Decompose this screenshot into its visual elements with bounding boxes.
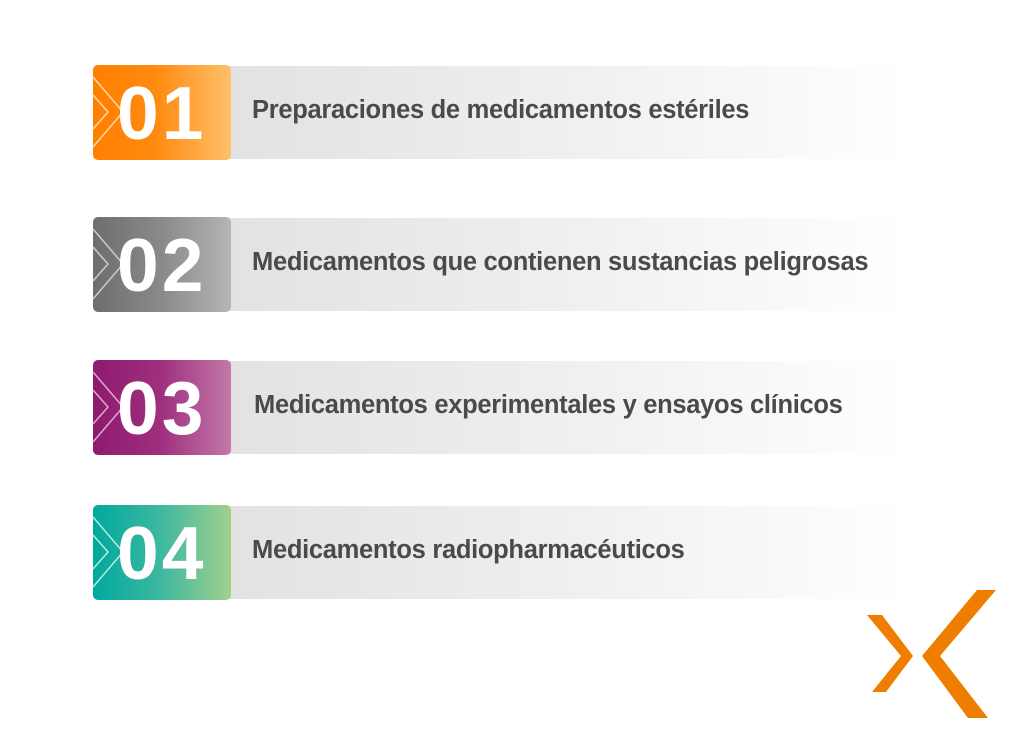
row 2 [93, 217, 868, 312]
number badge 01: 01 [117, 71, 206, 155]
text 3: Medicamentos experimentales y ensayos clínicos [254, 391, 843, 419]
text 1: Preparaciones de medicamentos estériles [252, 96, 749, 124]
number badge 03 [93, 360, 231, 455]
number badge 02 [93, 217, 231, 312]
number badge 04: 04 [117, 511, 206, 595]
number badge 01 [93, 65, 231, 160]
text 2: Medicamentos que contienen sustancias peligrosas [252, 248, 868, 276]
number badge 02: 02 [117, 223, 206, 307]
text 4: Medicamentos radiopharmacéuticos [252, 536, 685, 564]
row 1 [93, 65, 749, 160]
row 3 [93, 360, 843, 455]
row 4 [93, 505, 736, 600]
number badge 03: 03 [117, 366, 206, 450]
number badge 04 [93, 505, 231, 600]
